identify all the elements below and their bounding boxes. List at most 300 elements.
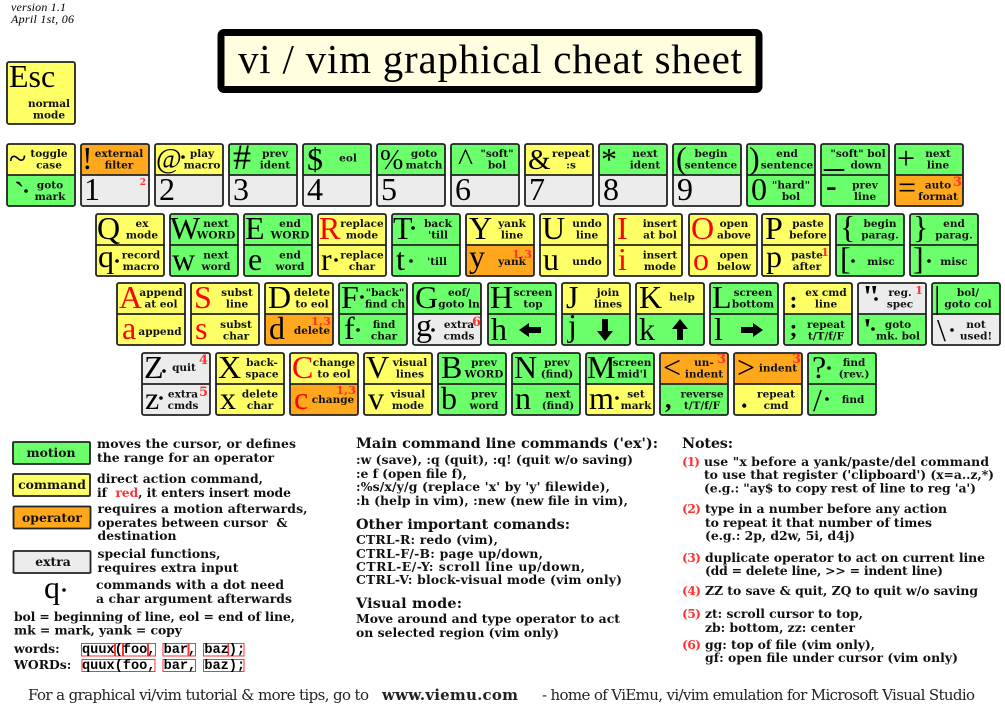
key: B / b <box>438 349 506 416</box>
note 2 <box>682 501 947 543</box>
key: $ / 4 <box>303 141 371 207</box>
note 1 <box>682 454 994 496</box>
key: greater than / period: indent <box>759 362 797 374</box>
key: K / k: k <box>639 311 655 347</box>
key: S / s: subst <box>221 287 253 299</box>
key: G / g <box>413 279 481 345</box>
key: ) / 0: sentence <box>761 160 814 172</box>
title: vi / vim graphical cheat sheet <box>238 36 743 82</box>
key: Esc: Esc <box>9 58 55 94</box>
key: * / 8: * <box>601 141 617 177</box>
key: C / c: 1,3 <box>336 383 356 397</box>
legend: dot commands: a char argument afterwards <box>96 591 292 606</box>
key: & / 7: 7 <box>529 171 545 207</box>
key: O / o: above <box>717 230 751 242</box>
note 2: (e.g.: 2p, d2w, 5i, d4j) <box>705 528 855 543</box>
key: } / ]: } <box>913 209 928 245</box>
key: greater than / period: repeat <box>757 388 795 400</box>
key: F / f: "back" <box>366 287 404 299</box>
key: & / 7: :s <box>566 160 576 172</box>
key: U / u: undo <box>572 256 602 268</box>
key: greater than / period: cmd <box>764 400 789 412</box>
key: { / [: begin <box>864 218 897 230</box>
key: ! / 1: 2 <box>140 178 146 188</box>
key: less than / comma: t/T/f/F <box>684 400 721 412</box>
legend: dot commands: commands with a dot need <box>96 577 284 592</box>
legend: operator: operator <box>22 510 82 525</box>
key: Y / y: line <box>501 230 523 242</box>
note 3 <box>682 550 985 578</box>
key: R / r <box>318 210 386 277</box>
version note: April 1st, 06 <box>10 12 74 26</box>
key: ! / 1 <box>81 140 149 207</box>
note 3: (dd = delete line, >> = indent line) <box>705 563 943 578</box>
text block: main ex commands: Main command line commands ('ex'): <box>356 435 658 452</box>
key: F / f: char <box>371 330 398 342</box>
key: ? / slash: / <box>813 382 822 418</box>
key: _ / - <box>821 130 889 206</box>
key: Esc <box>7 58 75 124</box>
key: I / i: insert <box>643 250 677 262</box>
key: + / =: 3 <box>953 175 962 190</box>
key: X / x <box>216 349 284 416</box>
key: N / n: prev <box>544 357 571 369</box>
footer: www.viemu.com <box>381 686 518 704</box>
key: ) / 0 <box>747 140 815 207</box>
legend: extra <box>14 546 239 575</box>
key: H / h: H <box>490 279 513 315</box>
key: U / u: U <box>542 210 565 246</box>
key: greater than / period: > <box>737 349 755 385</box>
key: _ / -: down <box>850 160 882 172</box>
key: S / s: line <box>226 298 248 310</box>
note 6 <box>682 637 958 665</box>
key: A / a: a <box>122 310 136 346</box>
key: Q / q: Q <box>97 210 120 246</box>
key: # / 3: ident <box>260 160 290 172</box>
key: M / m <box>586 349 654 416</box>
key: U / u: u <box>543 241 559 277</box>
legend: abbreviations: bol = beginning of line, eol = end of line, <box>14 609 295 624</box>
text block: main ex commands: :%s/x/y/g (replace 'x' by 'y' filewide), <box>356 479 610 494</box>
note 3: duplicate operator to act on current line <box>705 550 985 565</box>
key: Esc: mode <box>33 110 65 122</box>
key: Y / y: 1,3 <box>512 247 532 261</box>
key: Z / z: quit <box>172 362 196 374</box>
key: A / a: at eol <box>145 298 178 310</box>
key: Z / z <box>142 349 210 416</box>
key: J / j: lines <box>594 298 622 310</box>
key: ! / 1: external <box>95 148 143 160</box>
key: E / e: word <box>275 261 305 273</box>
key: A / a: append <box>139 287 183 299</box>
key: } / ]: end <box>943 218 965 230</box>
key: greater than / period <box>734 349 802 415</box>
key: S / s: char <box>223 330 250 342</box>
key: } / ] <box>910 209 978 276</box>
key: S / s: subst <box>220 319 252 331</box>
key: colon / semicolon: : <box>790 288 798 314</box>
key: X / x: space <box>245 368 279 380</box>
key: + / =: = <box>898 169 916 205</box>
key: pipe / backslash: goto col <box>944 298 992 310</box>
key: V / v: visual <box>390 388 425 400</box>
key: less than / comma: indent <box>685 368 723 380</box>
text block: main ex commands <box>356 435 658 508</box>
key: B / b: prev <box>471 388 498 400</box>
key: N / n <box>512 349 580 416</box>
key: X / x: X <box>218 349 241 385</box>
key: { / [: parag. <box>861 230 899 242</box>
key: double quote / single quote: mk. bol <box>876 330 920 342</box>
legend: WORDs example: quux(foo, bar, baz); <box>82 659 245 674</box>
key: A / a <box>117 279 185 346</box>
key: * / 8 <box>599 141 667 207</box>
key: N / n: next <box>545 388 571 400</box>
key: } / ]: parag. <box>935 230 973 242</box>
legend: dot commands <box>44 569 292 606</box>
key: ( / 9: 9 <box>677 171 693 207</box>
key: H / h: top <box>523 298 543 310</box>
key: Z / z: 5 <box>199 385 208 400</box>
text block: other commands: CTRL-E/-Y: scroll line up/down, <box>356 559 585 574</box>
key: Q / q: mode <box>126 230 158 242</box>
key: ( / 9 <box>673 140 741 207</box>
key: R / r: mode <box>346 230 378 242</box>
note 1: (e.g.: "ay$ to copy rest of line to reg 'a') <box>704 480 976 496</box>
key: O / o: o <box>693 241 709 277</box>
key: ^ / 6 <box>451 141 519 207</box>
key: C / c: to eol <box>317 368 351 380</box>
key: L / l: bottom <box>732 298 774 310</box>
key: pipe / backslash: | <box>934 279 940 315</box>
legend: command <box>13 471 291 500</box>
key: R / r: replace <box>340 250 384 262</box>
key: F / f: find <box>373 319 396 331</box>
key: L / l: L <box>712 279 732 315</box>
key: % / 5: 5 <box>381 171 397 207</box>
key: { / [: [ <box>840 240 851 276</box>
key: W / w: word <box>201 261 231 273</box>
key: tilde / backtick: ` <box>14 175 25 211</box>
key: tilde / backtick <box>7 140 75 211</box>
text block: other commands: CTRL-F/-B: page up/down, <box>356 546 543 561</box>
legend: extra: special functions, <box>98 546 220 561</box>
key: pipe / backslash: not <box>966 319 986 331</box>
key: ) / 0: 0 <box>751 171 767 207</box>
key: less than / comma: reverse <box>680 388 724 400</box>
key: R / r: R <box>319 210 341 246</box>
key: P / p: paste <box>791 250 823 262</box>
key: colon / semicolon: ex cmd <box>805 287 847 299</box>
note 1: (1) <box>682 454 700 469</box>
key: Y / y: Y <box>469 210 492 246</box>
key: G / g: extra <box>444 319 474 331</box>
key: O / o: open <box>720 218 749 230</box>
key: @ / 2: play <box>190 148 215 160</box>
key: less than / comma <box>660 349 728 415</box>
footer: - home of ViEmu, vi/vim emulation for Microsoft Visual Studio <box>542 686 975 704</box>
key: tilde / backtick: toggle <box>30 148 68 160</box>
key: @ / 2: 2 <box>159 171 175 207</box>
key: E / e: e <box>248 241 262 277</box>
key: R / r: char <box>349 261 376 273</box>
key: Z / z: cmds <box>168 400 198 412</box>
note 6: (6) <box>682 637 701 652</box>
key: J / j: j <box>567 307 577 343</box>
key: N / n: N <box>514 349 537 385</box>
key: F / f: F <box>341 279 359 315</box>
key: * / 8: 8 <box>603 171 619 207</box>
key: ) / 0: end <box>776 148 798 160</box>
key: M / m: set <box>627 388 645 400</box>
key: J / j <box>562 279 630 345</box>
key: tilde / backtick: case <box>36 160 62 172</box>
key: # / 3: # <box>233 137 251 177</box>
key: D / d: 1,3 <box>311 314 331 328</box>
text block: main ex commands: :e f (open file f), <box>356 466 467 481</box>
note 1: to use that register ('clipboard') (x=a..z,*) <box>704 467 994 482</box>
key: { / [: { <box>840 209 855 245</box>
key: X / x: back- <box>246 357 278 369</box>
text block: visual mode <box>355 595 620 640</box>
key: P / p: paste <box>792 218 824 230</box>
key: less than / comma: , <box>665 385 672 414</box>
key: Z / z: extra <box>168 388 198 400</box>
note 1: use "x before a yank/paste/del command <box>704 454 989 469</box>
key: D / d <box>265 279 333 346</box>
legend: words example <box>13 641 245 658</box>
key: E / e: end <box>279 218 301 230</box>
key: less than / comma: un- <box>694 357 714 369</box>
key: ! / 1: 1 <box>84 171 100 207</box>
key: I / i: I <box>617 210 628 246</box>
key: E / e <box>244 210 312 277</box>
key: D / d: d <box>269 310 285 346</box>
key: B / b: B <box>441 349 462 385</box>
key: N / n: (find) <box>541 368 573 380</box>
key: W / w: w <box>172 241 195 277</box>
key: colon / semicolon: ; <box>790 316 798 342</box>
key: @ / 2: @ <box>156 144 182 175</box>
key: Y / y <box>466 210 534 276</box>
key: $ / 4: eol <box>339 152 357 164</box>
key: Y / y: yank <box>497 256 527 268</box>
legend: operator: operates between cursor & <box>98 515 288 530</box>
key: _ / -: _ <box>823 130 845 175</box>
key: G / g: eof/ <box>448 287 470 299</box>
text block: main ex commands: :h (help in vim), :new (new file in vim), <box>356 493 628 508</box>
key: I / i <box>614 210 682 277</box>
key: ^ / 6: 6 <box>455 171 471 207</box>
key: C / c: C <box>292 349 313 385</box>
key: V / v: v <box>368 380 384 416</box>
key: double quote / single quote: reg. <box>888 287 912 299</box>
key: # / 3: prev <box>262 148 289 160</box>
key: double quote / single quote: goto <box>885 319 911 331</box>
key: S / s: S <box>194 279 212 315</box>
key: K / k: help <box>669 292 695 304</box>
key: $ / 4: 4 <box>307 171 323 207</box>
key: O / o: open <box>720 250 749 262</box>
key: T / t: t <box>396 241 405 277</box>
text block: visual mode: Visual mode: <box>355 595 462 612</box>
key: V / v: mode <box>392 400 424 412</box>
key: E / e: WORD <box>270 230 309 242</box>
legend: motion: motion <box>26 445 76 460</box>
key: O / o: below <box>717 261 752 273</box>
key: S / s <box>191 279 259 346</box>
key: W / w: W <box>170 210 201 246</box>
key: colon / semicolon: line <box>815 298 837 310</box>
key: G / g: 6 <box>472 315 481 330</box>
key: F / f: find ch <box>365 298 406 310</box>
key: G / g: g <box>416 307 432 343</box>
legend: command: command <box>18 477 86 492</box>
notes heading: Notes: <box>682 435 733 452</box>
key: pipe / backslash: \ <box>937 312 946 348</box>
key: B / b: prev <box>471 357 498 369</box>
legend: operator: requires a motion afterwards, <box>98 501 308 516</box>
key: { / [ <box>836 209 904 276</box>
key: H / h: screen <box>514 287 553 299</box>
key: Q / q <box>96 210 164 276</box>
key: B / b: WORD <box>464 368 503 380</box>
key: U / u: line <box>576 230 598 242</box>
key: K / k: K <box>639 279 662 315</box>
key: _ / -: prev <box>852 180 879 192</box>
key: ( / 9: begin <box>694 148 728 160</box>
key: P / p <box>762 210 830 276</box>
key: $ / 4: $ <box>307 141 323 177</box>
key: pipe / backslash: bol/ <box>957 287 979 299</box>
legend: motion: moves the cursor, or defines <box>97 436 296 451</box>
key: } / ]: misc <box>940 256 968 268</box>
note 4: (4) <box>682 583 701 598</box>
key: ! / 1: filter <box>105 160 134 172</box>
version note <box>10 0 74 26</box>
key: Z / z: Z <box>144 349 164 385</box>
key: F / f: f <box>344 310 355 346</box>
key: ? / slash: find <box>843 357 866 369</box>
key: M / m: m <box>589 380 614 416</box>
key: J / j: J <box>566 279 578 315</box>
key: A / a: append <box>138 326 182 338</box>
key: pipe / backslash: used! <box>960 330 992 342</box>
key: X / x: x <box>220 380 236 416</box>
key: T / t <box>392 210 460 277</box>
key: C / c: change <box>313 357 356 369</box>
text block: main ex commands: :w (save), :q (quit), :q! (quit w/o saving) <box>356 452 633 467</box>
text block: other commands: Other important comands: <box>356 516 570 533</box>
key: P / p: 1 <box>821 245 829 259</box>
key: G / g: goto ln <box>438 298 480 310</box>
key: ^ / 6: bol <box>488 160 506 172</box>
key: Y / y: y <box>469 238 485 274</box>
key: V / v <box>364 349 432 416</box>
key: T / t: 'till <box>428 230 448 242</box>
key: T / t: back <box>424 218 453 230</box>
key: greater than / period: 3 <box>792 352 801 367</box>
key: + / = <box>895 140 963 206</box>
key: @ / 2: macro <box>184 160 220 172</box>
legend: operator <box>14 501 308 543</box>
key: E / e: end <box>279 250 301 262</box>
key: M / m: M <box>587 349 615 385</box>
legend: command: if red, it enters insert mode <box>97 485 291 500</box>
key: tilde / backtick: ~ <box>9 140 26 176</box>
key: ? / slash: find <box>842 394 865 406</box>
legend: abbreviations: mk = mark, yank = copy <box>14 622 183 638</box>
key: + / =: line <box>927 160 949 172</box>
key: T / t: 'till <box>427 256 447 268</box>
key: X / x: delete <box>242 388 278 400</box>
version note: version 1.1 <box>11 0 66 14</box>
key: D / d: delete <box>294 287 330 299</box>
key: & / 7 <box>525 144 593 207</box>
text block: other commands: CTRL-R: redo (vim), <box>356 532 498 547</box>
key: tilde / backtick: mark <box>35 191 66 203</box>
key: I / i: at bol <box>643 230 677 242</box>
legend: abbreviations <box>14 609 295 638</box>
legend: motion: the range for an operator <box>97 450 274 465</box>
key: ? / slash <box>808 349 876 418</box>
key: ( / 9: sentence <box>685 160 738 172</box>
key: X / x: char <box>247 400 274 412</box>
key: + / =: + <box>897 140 915 176</box>
key: * / 8: ident <box>630 160 660 172</box>
key: + / =: format <box>918 191 958 203</box>
text block: visual mode: Move around and type operator to act <box>356 611 620 626</box>
key: V / v: visual <box>392 357 427 369</box>
key: ) / 0: bol <box>782 191 800 203</box>
key: ( / 9: ( <box>676 140 687 176</box>
key: R / r: replace <box>340 218 384 230</box>
note 6: gg: top of file (vim only), <box>705 637 875 652</box>
key: ) / 0: "hard" <box>772 180 810 192</box>
note 5: zb: bottom, zz: center <box>705 620 855 635</box>
key: Q / q: macro <box>123 261 159 273</box>
key: N / n: n <box>515 380 531 416</box>
key: Z / z: z <box>145 380 159 416</box>
key: E / e: E <box>245 210 265 246</box>
key: % / 5: match <box>406 160 443 172</box>
key: double quote / single quote <box>858 278 926 347</box>
text block: other commands <box>356 516 622 587</box>
key: B / b: word <box>469 400 499 412</box>
key: S / s: s <box>195 310 207 346</box>
key: B / b: b <box>441 380 457 416</box>
legend: operator: destination <box>98 528 176 543</box>
key: J / j: join <box>596 287 620 299</box>
key: * / 8: next <box>632 148 658 160</box>
key: colon / semicolon: t/T/f/F <box>808 330 845 342</box>
key: O / o: O <box>691 210 714 246</box>
footer: For a graphical vi/vim tutorial & more tips, go to <box>28 686 369 704</box>
key: double quote / single quote: ' <box>863 311 872 347</box>
legend: words example: quux(foo, bar, baz); <box>82 643 245 658</box>
key: P / p: P <box>765 210 783 246</box>
key: + / =: auto <box>925 180 951 192</box>
key: # / 3: 3 <box>233 171 249 207</box>
note 3: (3) <box>682 550 701 565</box>
note 5 <box>682 606 863 635</box>
key: & / 7: repeat <box>552 148 590 160</box>
key: M / m: mark <box>621 400 652 412</box>
key: tilde / backtick: goto <box>37 180 63 192</box>
key: _ / -: "soft" bol <box>830 148 886 160</box>
legend: command: direct action command, <box>97 471 263 486</box>
